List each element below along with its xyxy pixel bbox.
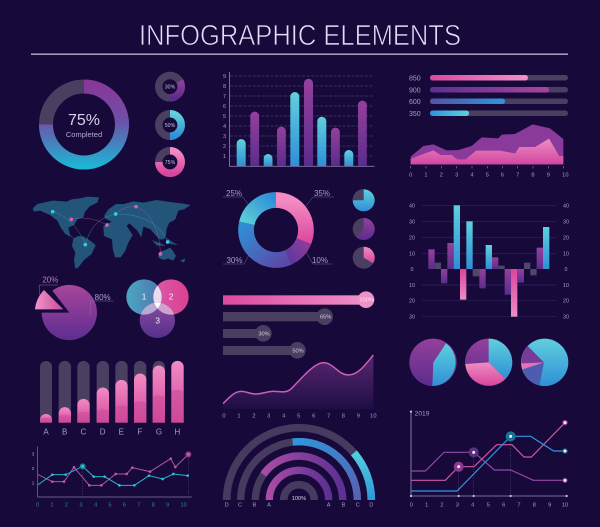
- capsule bars A to H: G: [156, 428, 162, 437]
- slider progress bars: middle: 100%: [359, 298, 374, 304]
- line chart: 2019: 1: [425, 503, 428, 509]
- line chart: 2019: 4: [471, 503, 474, 509]
- bar chart: vertical bars: 9: [223, 74, 226, 80]
- diverging bar chart: 40: [409, 203, 415, 209]
- semicircular ring chart: D: [225, 503, 229, 509]
- area chart: top right: 3: [455, 173, 458, 179]
- venn diagram: 3: [155, 316, 160, 326]
- diverging bar chart: 30: [563, 315, 569, 321]
- smooth area chart: middle: 4: [282, 413, 285, 419]
- diverging bar chart: 40: [563, 203, 569, 209]
- line chart: 2019: 7: [517, 503, 521, 509]
- area chart: top right: 5: [486, 173, 489, 179]
- donut: 75% completed: 75%: [68, 112, 100, 129]
- title: INFOGRAPHIC ELEMENTS: [139, 20, 461, 52]
- area chart: top right: 4: [470, 173, 474, 179]
- capsule bars A to H: D: [100, 428, 106, 437]
- semicircular ring chart: 100%: [292, 496, 306, 502]
- capsule bars A to H: A: [43, 428, 49, 437]
- smooth area chart: middle: 10: [370, 413, 376, 419]
- line chart: 2019: 10: [562, 503, 568, 509]
- pie chart: 20% and 80%: 80%: [95, 293, 111, 302]
- line chart: bottom left: 1: [50, 502, 54, 508]
- progress bars: top right: 600: [409, 99, 421, 106]
- diverging bar chart: 10: [563, 251, 569, 257]
- area chart: top right: 8: [531, 173, 535, 179]
- area chart: top right: 1: [424, 173, 428, 179]
- diverging bar chart: 20: [563, 299, 569, 305]
- small pies: [353, 189, 375, 269]
- world map with connections: [33, 197, 191, 269]
- progress bars: top right: 850: [409, 76, 421, 82]
- area chart: top right: 9: [547, 173, 550, 179]
- smooth area chart: middle: 5: [297, 413, 300, 419]
- bar chart: vertical bars: 5: [223, 114, 226, 120]
- pie chart: 20% and 80%: [35, 276, 113, 340]
- diverging bar chart: 20: [409, 299, 415, 305]
- small donuts: 50%: [165, 123, 176, 129]
- donut: 75% completed: [46, 86, 122, 162]
- capsule bars A to H: C: [80, 428, 86, 437]
- line chart: 2019: 6: [502, 503, 505, 509]
- capsule bars A to H: E: [119, 428, 124, 437]
- venn diagram: 1: [142, 292, 147, 302]
- line chart: bottom left: 6: [123, 502, 126, 508]
- diverging bar chart: 20: [409, 235, 415, 241]
- capsule bars A to H: H: [174, 428, 180, 437]
- diverging bar chart: 0: [411, 267, 414, 273]
- line chart: bottom left: 3: [32, 452, 35, 458]
- slider progress bars: middle: 30%: [258, 331, 270, 337]
- smooth area chart: middle: 8: [342, 413, 345, 419]
- area chart: top right: [409, 124, 568, 179]
- progress bars: top right: 900: [409, 88, 421, 94]
- bar chart: vertical bars: 3: [223, 134, 226, 140]
- diverging bar chart: 0: [565, 267, 568, 273]
- slider progress bars: middle: [223, 291, 374, 359]
- three pies: bottom right: [409, 339, 568, 386]
- small donuts: [159, 76, 181, 173]
- semicircular ring chart: B: [252, 503, 256, 509]
- semicircular ring chart: D: [369, 503, 373, 509]
- semicircular ring chart: C: [356, 503, 360, 509]
- line chart: bottom left: 9: [166, 502, 169, 508]
- area chart: top right: 7: [516, 173, 519, 179]
- diverging bar chart: 30: [409, 219, 415, 225]
- smooth area chart: middle: 3: [267, 413, 270, 419]
- venn diagram: 2: [169, 292, 174, 302]
- donut: four segments with labels: 30%: [226, 256, 243, 265]
- small donuts: 30%: [165, 85, 176, 91]
- line chart: 2019: [410, 410, 568, 509]
- line chart: bottom left: 2: [32, 466, 35, 472]
- area chart: top right: 10: [562, 173, 568, 179]
- progress bars: top right: 350: [409, 111, 421, 118]
- donut: 75% completed: Completed: [66, 130, 102, 139]
- line chart: bottom left: 3: [79, 502, 83, 508]
- line chart: 2019: 5: [487, 503, 490, 509]
- line chart: 2019: 3: [456, 503, 459, 509]
- bar chart: vertical bars: 7: [223, 94, 226, 100]
- line chart: bottom left: 5: [108, 502, 112, 508]
- bar chart: vertical bars: 1: [223, 154, 226, 160]
- donut: four segments with labels: 10%: [312, 256, 328, 265]
- bar chart: vertical bars: 2: [223, 144, 226, 150]
- line chart: 2019: 0: [410, 503, 413, 509]
- semicircular ring chart: A: [327, 503, 331, 509]
- line chart: 2019: 2019: [415, 410, 430, 417]
- diverging bar chart: 10: [563, 283, 569, 289]
- smooth area chart: middle: 2: [252, 413, 256, 419]
- diverging bar chart: [409, 203, 569, 321]
- line chart: bottom left: 2: [65, 502, 68, 508]
- line chart: bottom left: 4: [94, 502, 97, 508]
- area chart: top right: 0: [409, 173, 412, 179]
- diverging bar chart: 30: [563, 219, 569, 225]
- donut: four segments with labels: 35%: [314, 189, 330, 198]
- pie chart: 20% and 80%: 20%: [42, 276, 58, 285]
- smooth area chart: middle: [222, 355, 376, 419]
- bar chart: vertical bars: 8: [223, 84, 226, 90]
- slider progress bars: middle: 50%: [292, 348, 304, 354]
- line chart: bottom left: 8: [152, 502, 155, 508]
- semicircular ring chart: A: [267, 503, 271, 509]
- line chart: 2019: 2: [440, 503, 444, 509]
- small donuts: 75%: [165, 160, 176, 166]
- venn diagram: [126, 279, 189, 338]
- diverging bar chart: 10: [409, 283, 415, 289]
- bar chart: vertical bars: 4: [223, 124, 226, 130]
- slider progress bars: middle: 65%: [320, 315, 331, 321]
- smooth area chart: middle: 1: [237, 413, 241, 419]
- capsule bars A to H: [40, 361, 184, 437]
- semicircular ring chart: B: [341, 503, 345, 509]
- smooth area chart: middle: 6: [312, 413, 315, 419]
- smooth area chart: middle: 7: [327, 413, 330, 419]
- line chart: bottom left: 7: [137, 502, 141, 508]
- diverging bar chart: 10: [409, 251, 415, 257]
- line chart: bottom left: 10: [181, 502, 187, 508]
- line chart: bottom left: 1: [32, 480, 35, 486]
- diverging bar chart: 20: [563, 235, 569, 241]
- capsule bars A to H: F: [138, 428, 143, 437]
- area chart: top right: 2: [440, 173, 443, 179]
- smooth area chart: middle: 9: [357, 413, 360, 419]
- bar chart: vertical bars: 6: [223, 104, 226, 110]
- area chart: top right: 6: [501, 173, 504, 179]
- semicircular ring chart: C: [238, 503, 242, 509]
- line chart: 2019: 9: [548, 503, 551, 509]
- progress bars: top right: [409, 75, 568, 118]
- capsule bars A to H: B: [62, 428, 67, 437]
- line chart: bottom left: [32, 447, 192, 508]
- donut: four segments with labels: 25%: [226, 189, 242, 198]
- bar chart: vertical bars: [223, 72, 374, 166]
- line chart: bottom left: 0: [36, 502, 39, 508]
- smooth area chart: middle: 0: [222, 413, 226, 419]
- diverging bar chart: 30: [409, 315, 415, 321]
- semicircular ring chart: [225, 428, 373, 509]
- line chart: 2019: 8: [533, 503, 536, 509]
- donut: four segments with labels: [223, 189, 334, 265]
